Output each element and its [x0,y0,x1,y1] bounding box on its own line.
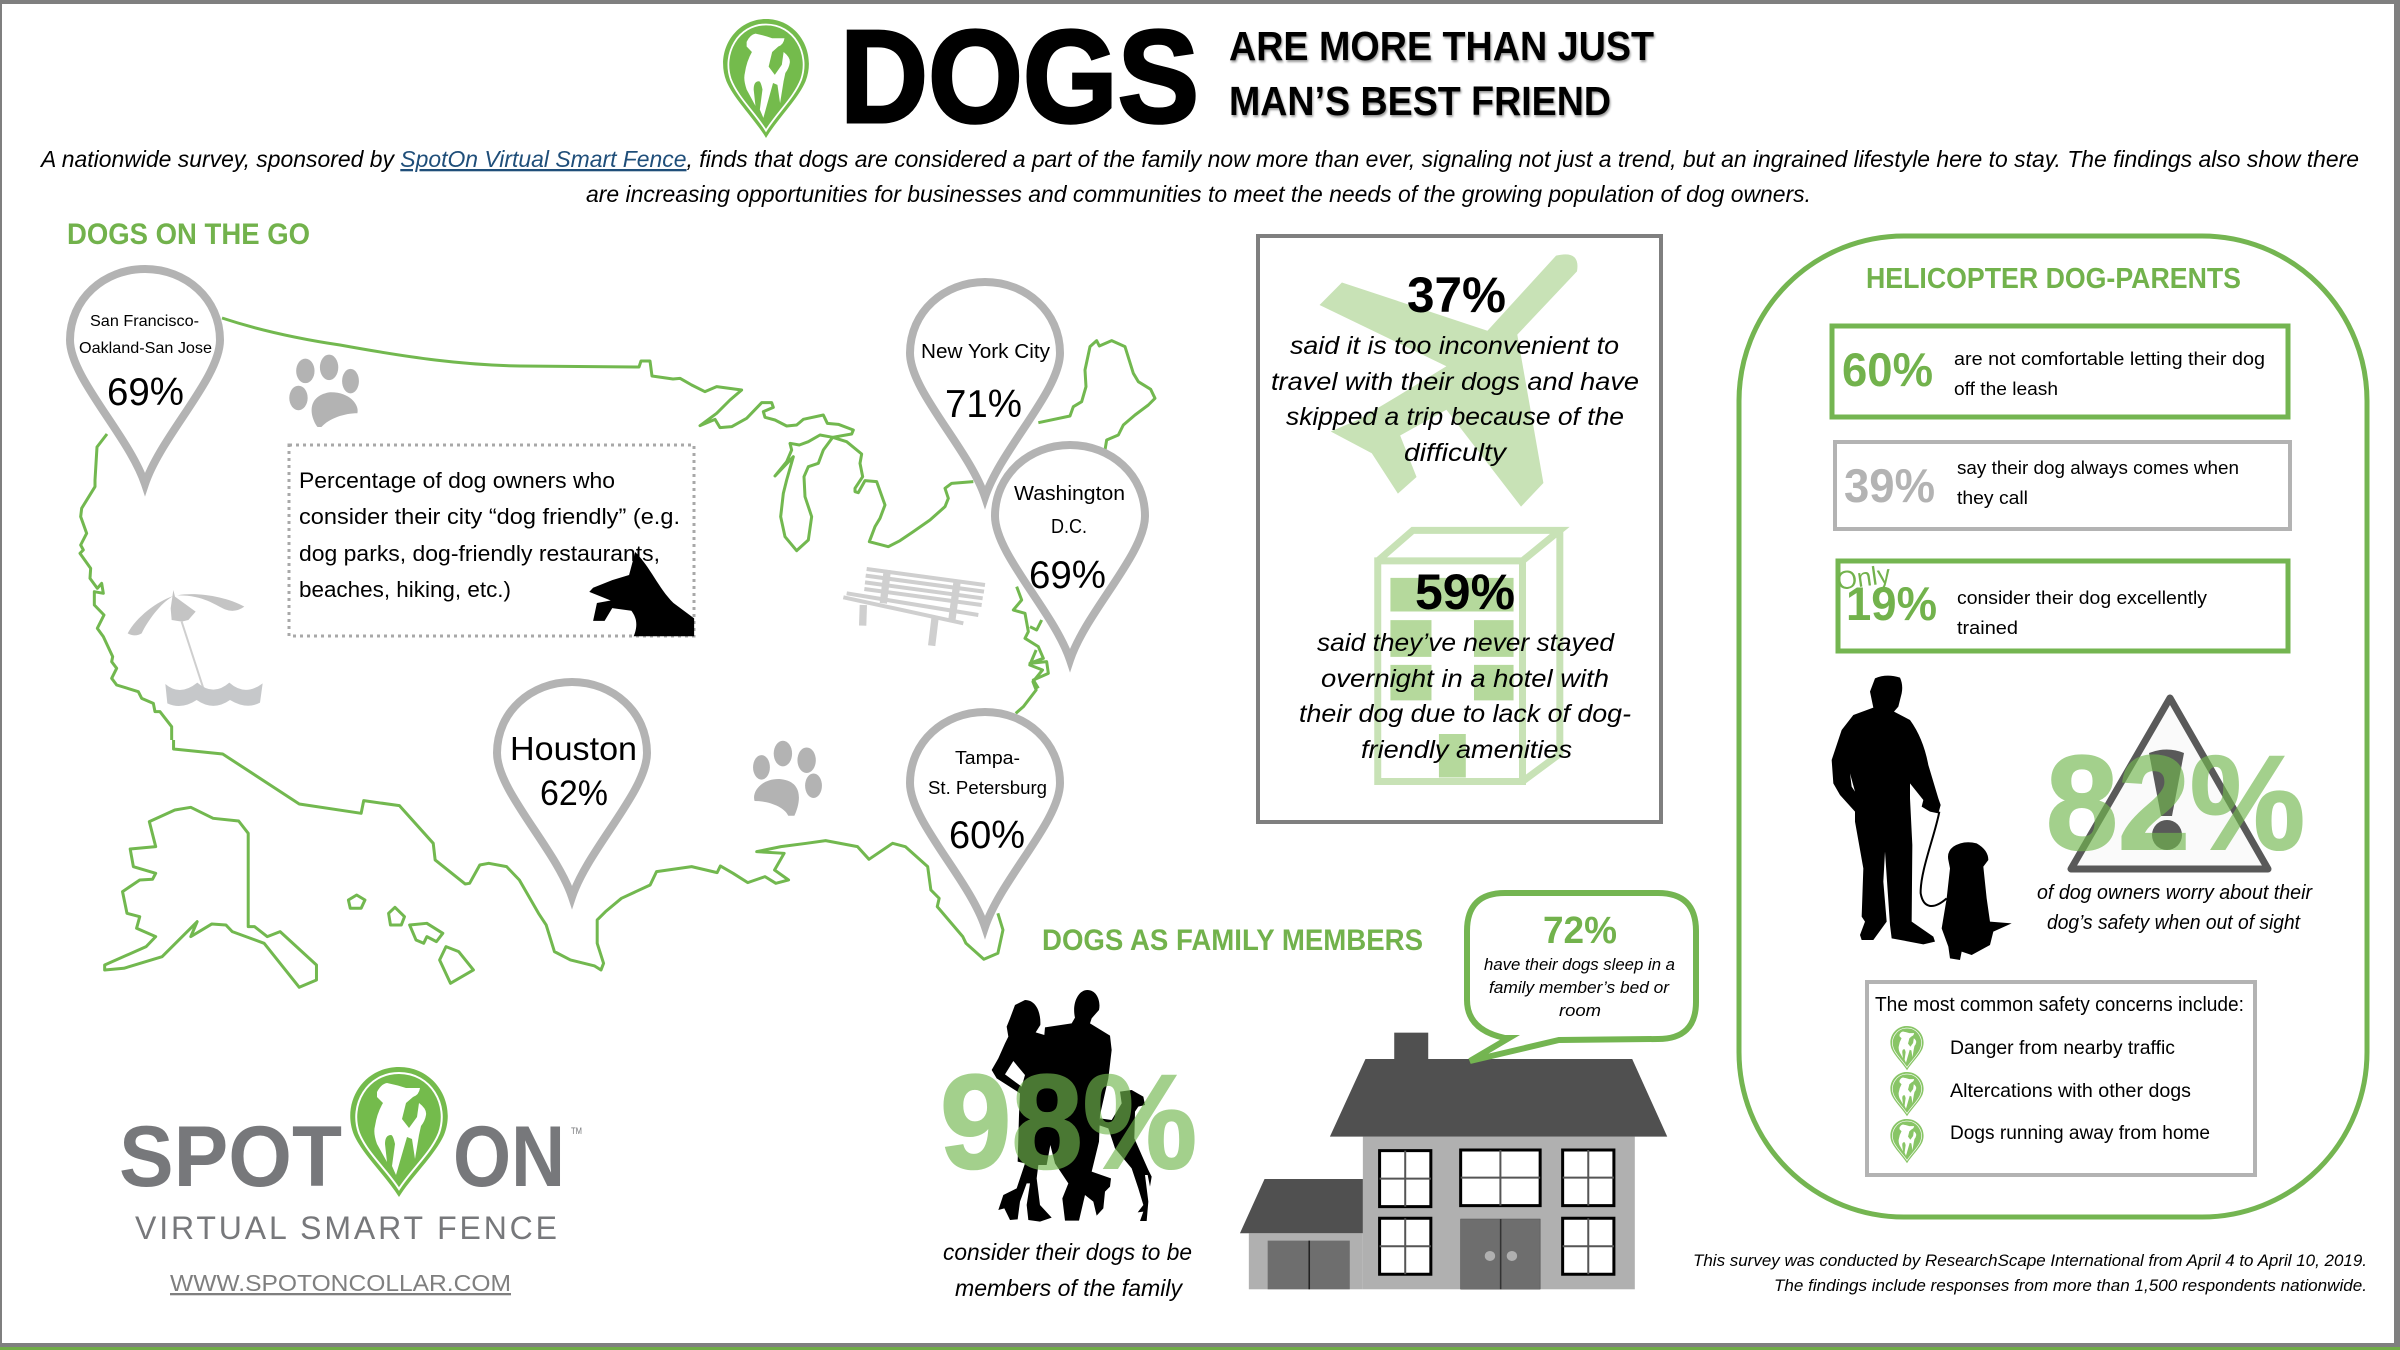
heading: helicopter dog-parents: HELICOPTER DOG-PARENTS [1866,263,2241,295]
panel: helicopter dog-parents [1739,236,2367,1217]
callout: 72 percent speech bubble: have their dogs sleep in a [1484,955,1675,974]
pin: Tampa St. Petersburg [910,712,1060,927]
text: safety caption: dog’s safety when out of sight [2047,912,2301,934]
stat: 37 percent: said it is too inconvenient to [1290,332,1619,360]
stat box: only 19 percent [1835,559,2288,651]
logo: SpotOn virtual smart fence: SPOT [119,1109,342,1205]
subtitle: ARE MORE THAN JUST [1229,23,1654,69]
subtitle [1229,23,1654,124]
stat: 59 percent: friendly amenities [1361,736,1572,764]
title: DOGS: DOGS [840,3,1199,150]
stat: 37 percent: difficulty [1404,439,1508,467]
pin: Washington D.C.: Washington [1014,483,1125,505]
pin: Tampa St. Petersburg: 60% [949,814,1025,857]
pin: Washington D.C.: D.C. [1051,516,1087,538]
stat box: 60 percent: are not comfortable letting their dog [1954,349,2265,369]
stat box: only 19 percent: Only [1835,559,1892,596]
text: family caption: consider their dogs to be [943,1239,1192,1265]
icon: list pin 3 [1890,1119,1924,1163]
intro text [39,146,2359,207]
icon: header logo pin [723,19,809,138]
footnote: This survey was conducted by ResearchScape International from April 4 to April 10, 2019. [1693,1251,2367,1270]
stat box: only 19 percent: 19% [1846,577,1937,630]
legend box: dog friendly definition: consider their city “dog friendly” (e.g. [299,504,680,529]
icon: paw print bottom [753,741,822,816]
stat box: 39 percent: they call [1957,488,2028,508]
stat box: 60 percent [1832,326,2288,417]
pin: Houston [497,682,647,897]
callout: 72 percent speech bubble: 72% [1543,910,1617,952]
pin: Tampa St. Petersburg: Tampa- [955,748,1020,768]
icon: dog head silhouette [589,552,694,636]
stat box: 39 percent: say their dog always comes when [1957,458,2239,478]
intro text: are increasing opportunities for businesses and communities to meet the needs of the growing population of dog owners. [586,181,1811,207]
logo: SpotOn virtual smart fence [119,1067,582,1296]
stat: 37 percent [1271,267,1639,467]
icon: man walking dog silhouette [1832,676,2012,960]
icon: airplane [1320,254,1577,507]
pin: Washington D.C. [995,445,1145,660]
stat: 59 percent: overnight in a hotel with [1321,665,1609,693]
icon: paw print top [289,355,359,427]
pin: San Francisco [70,269,220,484]
icon: list pin 1 [1890,1026,1924,1070]
heading: dogs as family members: DOGS AS FAMILY MEMBERS [1042,924,1423,957]
stat box: only 19 percent: trained [1957,618,2018,638]
icon: house [1240,1033,1667,1289]
callout: 72 percent speech bubble: family member’s bed or [1489,978,1670,997]
legend box: dog friendly definition: Percentage of dog owners who [299,468,615,493]
pin: San Francisco: San Francisco- [90,313,199,330]
stat: 59 percent: their dog due to lack of dog- [1299,700,1631,728]
footnote: The findings include responses from more than 1,500 respondents nationwide. [1774,1276,2367,1295]
stat: 37 percent: travel with their dogs and have [1271,368,1639,396]
panel: safety concerns list: Altercations with other dogs [1950,1081,2191,1102]
pin: Houston: 62% [540,774,608,813]
logo: SpotOn virtual smart fence: VIRTUAL SMART FENCE [135,1210,557,1246]
stat: 37 percent: 37% [1407,267,1506,323]
heading: dogs on the go: DOGS ON THE GO [67,218,310,251]
pin: San Francisco: Oakland-San Jose [79,340,212,357]
logo: SpotOn virtual smart fence: TM [571,1126,582,1136]
pin: New York City: 71% [945,383,1022,426]
text: family caption [943,1239,1192,1301]
footnote [1693,1251,2367,1295]
callout: 72 percent speech bubble: room [1559,1001,1601,1020]
pin: New York City [910,282,1060,497]
pin: Washington D.C.: 69% [1029,554,1106,597]
panel: safety concerns list [1867,982,2255,1175]
hawaii [348,895,473,983]
stat: 59 percent: said they’ve never stayed [1317,629,1615,657]
stat box: 39 percent: 39% [1844,459,1935,512]
panel: travel statistics [1258,236,1661,822]
logo: SpotOn virtual smart fence: WWW.SPOTONCOLLAR.COM [170,1270,511,1296]
icon: park bench [843,569,985,646]
alaska [105,807,316,987]
legend box: dog friendly definition: beaches, hiking, etc.) [299,577,511,602]
text: family caption: members of the family [955,1275,1183,1301]
subtitle: MAN’S BEST FRIEND [1229,78,1611,124]
stat box: 39 percent [1835,442,2290,529]
callout: 72 percent speech bubble [1467,893,1696,1061]
stat box: only 19 percent: consider their dog excellently [1957,588,2207,608]
icon: warning triangle [2071,698,2268,869]
legend box: dog friendly definition [289,445,694,636]
section: dogs as family members [940,893,1696,1301]
stat box: 60 percent: 60% [1842,343,1933,396]
icon: beach umbrella [128,590,263,706]
stat: 59 percent: 59% [1415,564,1515,620]
pin: Tampa St. Petersburg: St. Petersburg [928,778,1047,798]
stat: 82 percent: 82% [2046,729,2305,878]
pin: Houston: Houston [510,730,637,767]
panel: safety concerns list: Dogs running away from home [1950,1123,2210,1144]
logo: SpotOn virtual smart fence: ON [453,1109,565,1205]
icon: list pin 2 [1890,1072,1924,1116]
title block [723,3,1654,150]
intro text: A nationwide survey, sponsored by SpotOn Virtual Smart Fence, finds that dogs are considered a part of the family now more than ever, signaling not just a trend, but an ingrained lifestyle here to stay. The findings also show there [39,146,2359,172]
icon: logo pin [350,1067,448,1197]
legend box: dog friendly definition: dog parks, dog-friendly restaurants, [299,541,660,566]
pin: New York City: New York City [921,341,1050,363]
icon: hotel building [1378,530,1560,781]
map of the United States [80,318,1155,987]
text: safety caption: of dog owners worry about their [2037,882,2313,904]
stat: 98 percent: 98% [940,1048,1197,1197]
panel: safety concerns list: The most common safety concerns include: [1875,994,2244,1016]
stat: 37 percent: skipped a trip because of the [1286,403,1624,431]
panel: safety concerns list: Danger from nearby traffic [1950,1038,2175,1059]
stat: 59 percent [1299,564,1631,764]
icon: family silhouette [992,990,1152,1222]
text: safety caption [2037,882,2313,934]
stat box: 60 percent: off the leash [1954,379,2058,399]
pin: San Francisco: 69% [107,371,184,414]
